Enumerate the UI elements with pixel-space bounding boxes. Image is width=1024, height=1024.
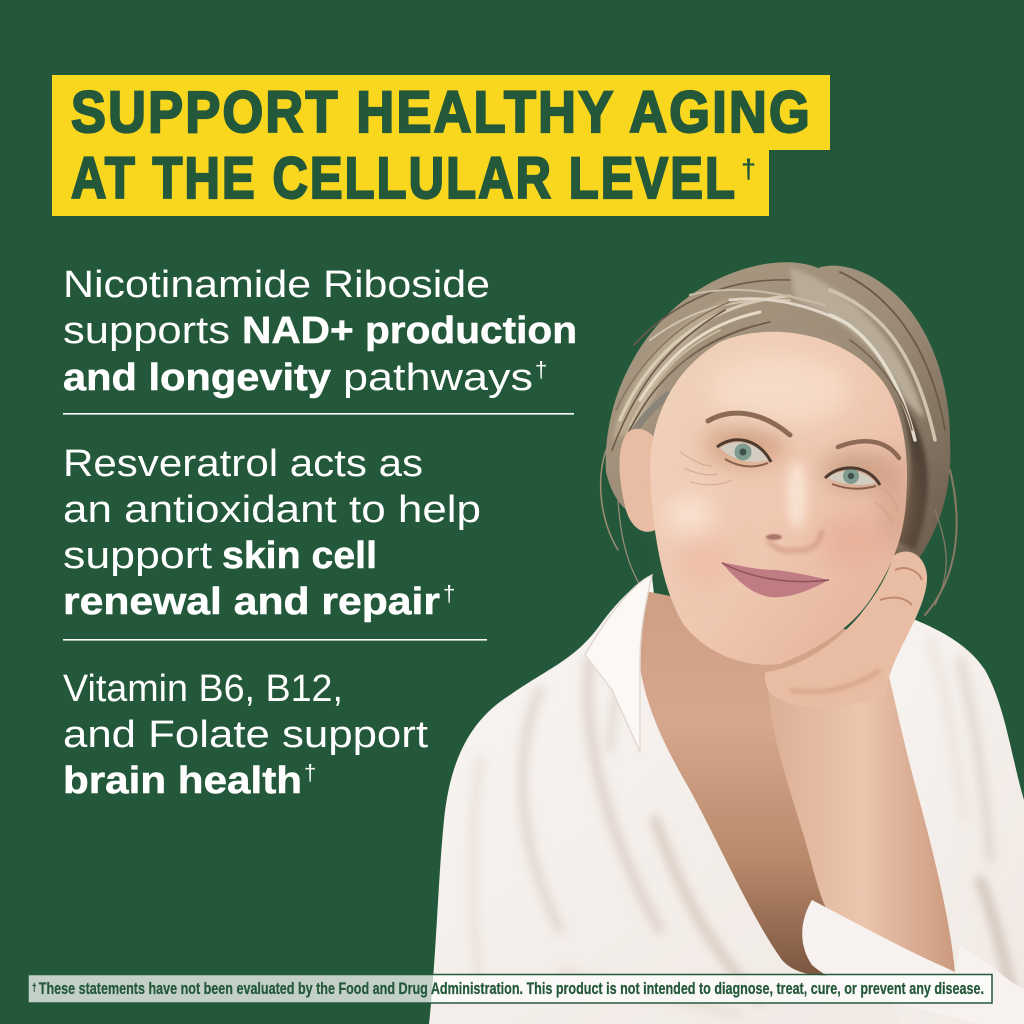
collar (585, 575, 652, 752)
text block: nicotinamide riboside: pathways (343, 357, 533, 399)
text block: vitamins: and Folate support (63, 714, 428, 756)
text block: resveratrol: support (63, 535, 213, 577)
photo: smiling woman resting chin on hand (429, 262, 1024, 1024)
skin shading (666, 355, 909, 588)
text block: vitamins: brain health (63, 760, 302, 802)
text block: nicotinamide riboside: NAD+ production (242, 310, 577, 352)
wrinkles (680, 452, 898, 524)
text block: resveratrol: † (443, 581, 455, 606)
text block: nicotinamide riboside: supports (63, 310, 230, 352)
shirt folds (472, 640, 1015, 1015)
text block: nicotinamide riboside: and longevity (63, 357, 331, 399)
text block: nicotinamide riboside (63, 264, 577, 399)
text block: resveratrol: skin cell (222, 535, 377, 577)
hair (601, 262, 957, 615)
text block: vitamins: † (304, 760, 316, 785)
sleeve cuff (802, 900, 1024, 1024)
text block: resveratrol: Resveratrol acts as (63, 443, 423, 485)
banner shape (52, 75, 830, 216)
nose (766, 461, 822, 551)
lips (721, 562, 829, 597)
headline line 2: AT THE CELLULAR LEVEL (71, 146, 737, 211)
headline banner (52, 75, 830, 216)
eyebrows (708, 413, 899, 458)
headline dagger: † (741, 154, 756, 184)
hand under chin (765, 551, 927, 708)
shirt (429, 575, 1024, 1024)
right eye (825, 468, 880, 489)
ear (620, 429, 656, 532)
text block: vitamins: Vitamin B6, B12, (63, 668, 343, 710)
disclaimer box (28, 974, 992, 1003)
text block: resveratrol (63, 443, 481, 623)
text block: vitamins (63, 668, 428, 802)
headline line 1: SUPPORT HEALTHY AGING (71, 80, 812, 145)
text block: nicotinamide riboside: † (535, 357, 547, 382)
text block: resveratrol: an antioxidant to help (63, 489, 481, 531)
disclaimer box: † (32, 982, 39, 994)
forearm (768, 660, 955, 972)
text block: resveratrol: renewal and repair (63, 581, 440, 623)
neck and chest (637, 590, 850, 976)
left eye (717, 440, 771, 466)
face (650, 332, 909, 665)
text block: nicotinamide riboside: Nicotinamide Riboside (63, 264, 490, 306)
